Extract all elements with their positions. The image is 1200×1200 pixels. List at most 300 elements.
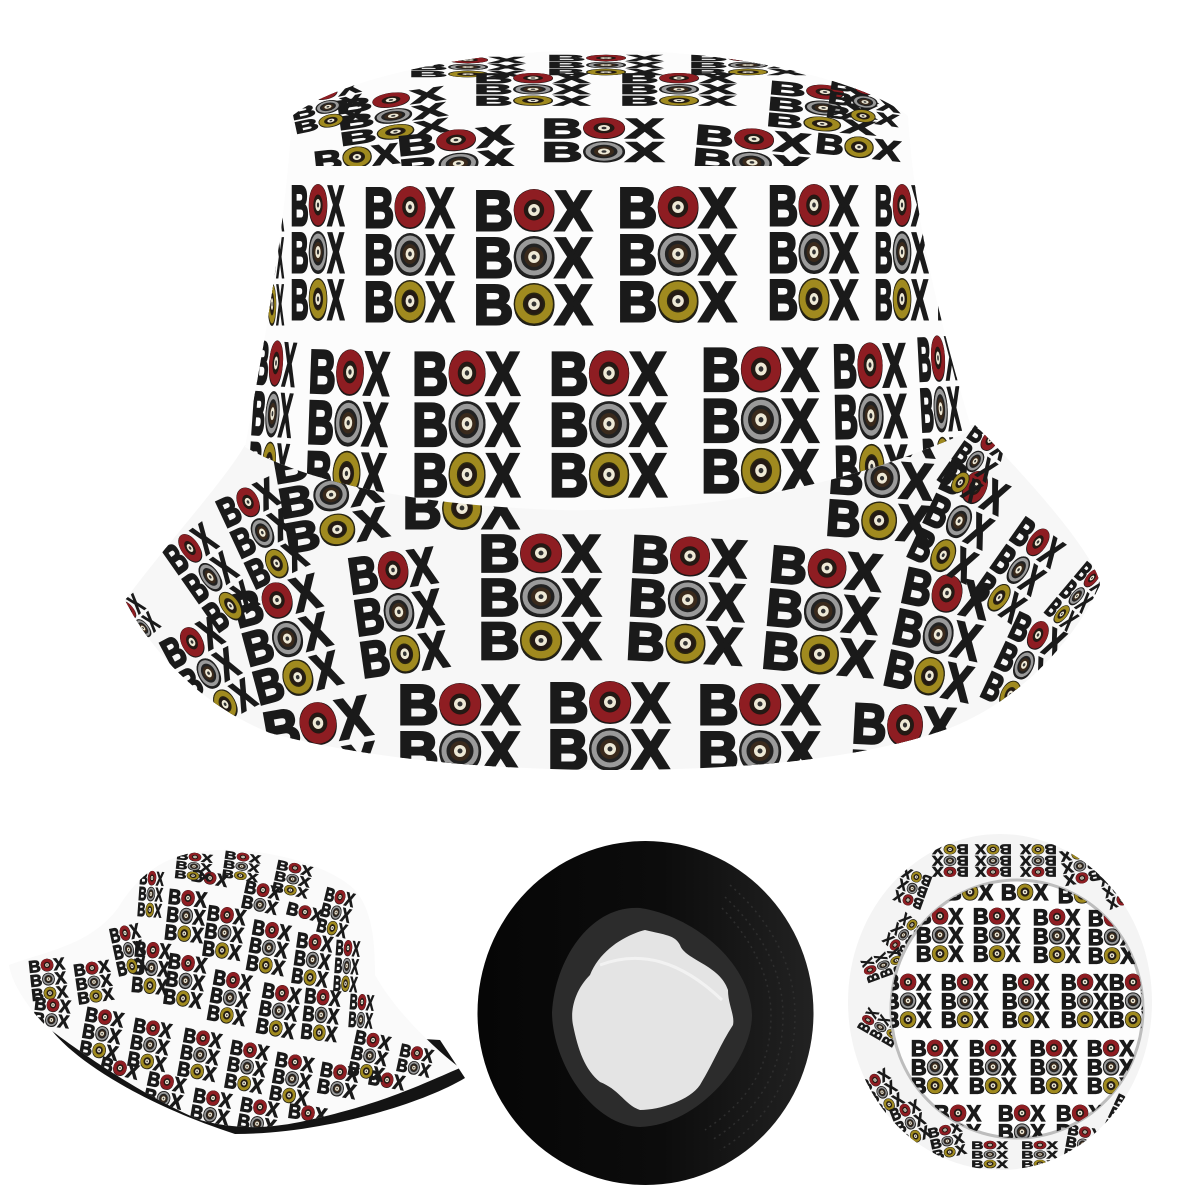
outer brim: BOX [865,1077,901,1109]
crown top pattern: BOX [542,113,664,144]
printed fabric: BOX [32,1008,71,1032]
outer brim: BOX [975,864,1012,879]
hat brim: BOX [259,684,375,765]
outer brim: BOX [1021,1158,1058,1171]
printed fabric: BOX [398,1040,436,1067]
main bucket hat [106,50,1113,811]
inner crown panel: BOX [1109,970,1156,995]
printed fabric: BOX [221,868,259,885]
outer brim: BOX [896,909,928,940]
hat brim: BOX [947,436,1001,488]
outer brim: BOX [1106,1104,1141,1134]
inner crown panel: BOX [1030,1036,1077,1061]
printed fabric: BOX [76,984,116,1008]
outer brim [848,834,1152,1171]
crown row one: BOX [875,223,928,285]
inner crown panel: BOX [1056,1101,1103,1126]
black inner brim edge [45,1020,465,1134]
hat brim: BOX [281,498,391,563]
inner crown panel: BOX [998,1120,1045,1145]
printed fabric: BOX [139,868,165,891]
small hat: side view [9,849,465,1139]
hat brim: BOX [176,544,245,612]
inner crown panel [884,880,1156,1145]
hat brim [126,425,1100,770]
printed fabric: BOX [175,1058,218,1087]
crown top pattern: BOX [339,115,451,151]
inner crown panel: BOX [1002,970,1049,995]
inner crown panel: BOX [1088,943,1135,969]
inner crown panel: BOX [1058,883,1105,908]
crown top pattern: BOX [827,88,902,117]
outer brim: BOX [879,929,911,961]
hat brim: BOX [901,519,983,593]
crown row two: BOX [250,381,294,450]
printed fabric: BOX [257,997,299,1027]
hat brim: BOX [479,613,600,671]
printed fabric: BOX [208,984,250,1014]
outer brim: BOX [895,875,930,900]
hat brim: BOX [121,607,165,650]
inner crown panel: BOX [1061,970,1108,995]
inner crown panel: BOX [1088,925,1135,950]
hat brim: BOX [548,671,669,734]
crown row two: BOX [919,377,962,445]
printed fabric: BOX [290,965,329,993]
crown top pattern: BOX [694,120,811,160]
printed fabric: BOX [267,1082,310,1111]
hat brim: BOX [965,564,1032,631]
hat brim: BOX [479,525,600,583]
stitched brim rows [705,885,795,1150]
printed fabric: BOX [273,869,311,891]
outer brim: BOX [1020,864,1057,879]
hat brim: BOX [171,639,246,709]
hat brim: BOX [1003,604,1071,667]
crown row one: BOX [260,226,284,289]
printed fabric: BOX [107,919,142,948]
printed fabric: BOX [181,1025,224,1054]
hat brim: BOX [989,633,1057,696]
outer brim: BOX [1066,1122,1103,1144]
printed fabric: BOX [222,858,261,876]
outer brim: BOX [891,886,926,912]
white crown lining [572,930,733,1110]
printed fabric: BOX [238,1094,281,1123]
crown top pattern: BOX [474,82,590,97]
outer brim: BOX [898,1123,934,1152]
outer brim: BOX [971,1158,1008,1171]
crown top pattern: BOX [689,68,805,77]
hat brim: BOX [403,384,518,446]
outer brim: BOX [975,852,1012,867]
inner crown panel: BOX [1088,906,1135,931]
inner crown panel: BOX [911,1073,958,1099]
inner crown panel: BOX [1061,1007,1108,1033]
hat brim: BOX [238,603,336,677]
inner crown panel: BOX [969,1036,1016,1061]
printed fabric: BOX [314,914,349,943]
crown top pattern: BOX [547,54,663,63]
inner crown panel: BOX [1033,905,1080,930]
crown row two: BOX [246,432,291,501]
printed fabric: BOX [224,849,262,867]
printed fabric: BOX [270,1066,313,1094]
crown row two: BOX [921,427,965,496]
outer brim: BOX [1112,1091,1147,1121]
crown row two: BOX [253,331,298,399]
crown row two: BOX [412,441,519,509]
crown top pattern: BOX [474,71,590,86]
crown row one: BOX [938,221,962,284]
inner crown panel: BOX [911,1036,958,1061]
inner crown panel: BOX [941,1007,988,1033]
hat brim: BOX [1070,556,1113,600]
inner crown panel: BOX [884,970,931,995]
printed fabric: BOX [176,850,214,866]
crown top pattern: BOX [398,143,516,186]
inner crown panel: BOX [969,1073,1016,1099]
printed fabric: BOX [165,903,206,931]
printed fabric: BOX [130,974,169,1000]
printed fabric: BOX [367,1066,407,1095]
inner crown panel: BOX [969,1055,1016,1080]
crown row one: BOX [618,176,736,239]
outer brim: BOX [887,919,920,950]
outer brim: BOX [1020,841,1057,856]
printed fabric: BOX [164,967,206,996]
hat brim: BOX [345,537,440,605]
hat brim: BOX [760,621,876,688]
crown row one: BOX [291,176,344,238]
crown top pattern: BOX [409,70,525,79]
outer brim: BOX [900,863,934,889]
hat brim: BOX [933,451,1015,525]
crown row one: BOX [474,179,592,242]
printed fabric: BOX [132,956,170,982]
inner crown panel: BOX [973,904,1020,929]
outer brim: BOX [1096,863,1131,889]
hat brim: BOX [240,532,314,598]
inner crown panel: BOX [916,904,963,929]
hat brim: BOX [830,406,937,469]
printed fabric: BOX [128,1032,171,1060]
outer brim: BOX [927,1120,963,1142]
hat brim: BOX [196,573,265,641]
printed fabric: BOX [125,1048,168,1077]
printed fabric: BOX [353,1026,393,1055]
crown top pattern: BOX [312,138,400,178]
outer brim: BOX [1062,866,1102,888]
crown row one: BOX [260,179,284,242]
printed fabric: BOX [29,968,68,991]
printed fabric: BOX [137,900,163,922]
crown top pattern: BOX [396,120,514,163]
printed fabric: BOX [222,1070,265,1099]
printed fabric: BOX [74,970,114,994]
printed fabric: BOX [348,1008,374,1033]
black brim lining [478,841,814,1185]
hat brim: BOX [698,720,819,783]
hat brim: BOX [211,471,285,537]
crown row one: BOX [364,177,454,240]
outer brim: BOX [1100,874,1135,900]
inner crown panel: BOX [934,1101,981,1126]
inner sweatband [552,908,752,1127]
crown row one: BOX [364,271,454,334]
printed fabric: BOX [349,990,375,1015]
printed fabric: BOX [273,1049,316,1078]
hat brim: BOX [625,612,743,677]
printed fabric: BOX [162,985,203,1014]
crown row two: BOX [549,391,666,459]
crown top pattern: BOX [409,63,525,72]
hat brim: BOX [187,670,263,740]
hat brim: BOX [154,608,230,678]
crown row two: BOX [701,337,818,404]
outer brim: BOX [1064,1134,1101,1156]
printed fabric: BOX [346,1057,386,1086]
printed fabric: BOX [322,883,357,912]
crown top pattern: BOX [290,90,365,124]
crown row one: BOX [618,223,736,286]
hat brim: BOX [398,720,519,783]
small hat: top view [848,834,1156,1171]
hat brim: BOX [267,731,383,811]
hat brim: BOX [226,502,299,567]
hat brim: BOX [269,428,379,493]
hat brim: BOX [630,525,748,589]
crown row two: BOX [832,333,906,401]
inner crown panel: BOX [1030,1055,1077,1080]
outer brim: BOX [971,1140,1008,1152]
outer brim: BOX [929,1131,966,1153]
hat brim: BOX [479,569,600,627]
crown row one: BOX [364,224,454,287]
printed fabric: BOX [206,902,247,931]
crown top pattern: BOX [542,137,664,168]
printed fabric: BOX [190,866,230,891]
printed fabric: BOX [395,1055,433,1082]
inner crown panel: BOX [973,923,1020,948]
hat brim: BOX [248,642,347,716]
crown row one: BOX [875,176,928,238]
crown top pattern: BOX [814,128,902,168]
outer brim: BOX [893,1110,928,1138]
inner crown panel: BOX [1002,1007,1049,1033]
printed fabric: BOX [292,947,332,975]
hat brim: BOX [403,431,518,493]
hat brim: BOX [698,673,819,736]
crown row one: BOX [875,270,928,332]
printed fabric: BOX [315,1076,358,1104]
inner crown panel: BOX [998,1101,1045,1126]
crown top pattern: BOX [620,82,736,97]
crown top pattern: BOX [767,93,878,124]
inner crown panel: BOX [941,970,988,995]
printed fabric: BOX [77,1037,120,1066]
printed fabric: BOX [318,899,353,927]
inner crown panel: BOX [941,989,988,1014]
printed fabric: BOX [247,934,289,964]
crown row one [268,184,942,326]
printed fabric: BOX [145,1068,188,1098]
outer brim: BOX [1062,1146,1098,1168]
hat brim: BOX [227,565,326,638]
hat brim: BOX [851,693,957,761]
printed fabric: BOX [98,1054,141,1085]
outer brim: BOX [858,955,884,984]
printed fabric: BOX [332,972,359,997]
printed fabric: BOX [295,929,334,958]
crown row two: BOX [412,391,519,459]
hat brim: BOX [984,537,1052,603]
printed fabric: BOX [211,966,254,996]
crown row one: BOX [768,269,858,332]
hat brim: BOX [848,740,955,807]
crown top pattern [293,54,902,166]
printed fabric: BOX [270,880,309,902]
crown row one: BOX [260,273,284,336]
outer brim: BOX [855,1005,883,1036]
printed fabric: BOX [205,1001,247,1031]
outer brim: BOX [1021,1149,1058,1162]
crown row two: BOX [549,442,666,510]
outer brim: BOX [1100,1117,1136,1146]
hat brim: BOX [627,569,745,633]
inner crown panel: BOX [1109,1007,1156,1033]
crown row two: BOX [701,438,818,506]
small hat: underside view [478,841,814,1185]
crown top pattern: BOX [474,94,590,108]
outer brim: BOX [1104,886,1139,912]
printed fabric: BOX [284,898,325,927]
printed fabric: BOX [254,1014,296,1044]
hat brim: BOX [548,718,669,781]
hat brim: BOX [357,621,452,689]
hat brim: BOX [917,485,999,559]
crown top pattern: BOX [825,102,900,131]
hat brim: BOX [351,579,446,647]
outer brim: BOX [971,1149,1008,1162]
outer brim: BOX [858,1065,894,1097]
crown row two: BOX [306,389,389,459]
inner crown panel: BOX [1033,942,1080,968]
printed fabric: BOX [138,884,164,906]
printed fabric: BOX [203,919,245,948]
crown row two: BOX [308,338,390,408]
printed fabric: BOX [178,1042,221,1070]
printed fabric: BOX [131,1015,174,1044]
crown top pattern: BOX [829,74,904,103]
printed fabric: BOX [334,954,360,979]
printed fabric: BOX [33,993,72,1017]
inner crown panel: BOX [1109,989,1156,1014]
inner crown panel: BOX [1056,1120,1103,1145]
printed fabric: BOX [235,1111,278,1139]
hat brim: BOX [880,640,977,713]
outer brim: BOX [1058,842,1097,864]
printed fabric: BOX [201,937,242,966]
outer brim: BOX [932,852,969,867]
inner crown panel: BOX [973,941,1020,967]
crown row one: BOX [291,270,344,332]
inner crown panel: BOX [1061,989,1108,1014]
crown top pattern: BOX [287,77,362,110]
crown row two: BOX [304,439,387,510]
crown top pattern: BOX [547,61,663,70]
crown row two: BOX [833,384,907,452]
inner crown panel: BOX [1033,924,1080,949]
hat brim: BOX [764,578,880,645]
inner crown panel: BOX [911,1055,958,1080]
printed fabric [9,849,460,1139]
printed fabric: BOX [163,921,204,948]
hat brim: BOX [398,673,519,736]
crown row one: BOX [938,268,962,331]
crown row one: BOX [618,270,736,333]
printed fabric: BOX [115,952,149,981]
printed fabric: BOX [250,916,293,946]
outer brim: BOX [885,945,911,975]
printed fabric: BOX [287,1101,328,1128]
printed fabric: BOX [72,956,112,980]
inner crown panel: BOX [1087,1036,1134,1061]
printed fabric: BOX [244,951,286,981]
hat brim: BOX [1055,574,1098,618]
outer brim: BOX [932,864,969,879]
printed fabric: BOX [349,1042,389,1070]
inner crown panel: BOX [1030,1073,1077,1099]
outer brim: BOX [1020,852,1057,867]
printed fabric: BOX [239,891,280,919]
crown row one: BOX [938,174,962,237]
hat brim: BOX [1039,592,1083,636]
crown row two: BOX [412,340,519,408]
crown row two: BOX [834,434,908,502]
inner crown panel: BOX [916,941,963,967]
printed fabric: BOX [225,1054,268,1082]
printed fabric: BOX [83,1004,126,1033]
printed fabric: BOX [111,935,146,964]
printed fabric: BOX [188,1102,231,1130]
inner crown panel: BOX [946,880,993,905]
inner crown panel: BOX [934,1120,981,1145]
inner crown panel: BOX [1087,1055,1134,1080]
crown top pattern: BOX [768,77,880,108]
printed fabric: BOX [133,938,172,965]
printed fabric: BOX [174,868,212,885]
printed fabric: BOX [243,876,283,904]
printed fabric: BOX [301,1003,340,1030]
inner crown panel: BOX [884,989,931,1014]
printed fabric: BOX [28,954,67,977]
printed fabric: BOX [275,858,314,880]
printed fabric: BOX [335,936,361,961]
hat brim: BOX [156,516,225,583]
printed fabric: BOX [318,1059,361,1088]
hat brim: BOX [1004,509,1071,575]
inner crown panel: BOX [1002,989,1049,1014]
inner crown panel: BOX [1001,880,1048,905]
crown row one: BOX [291,223,344,285]
outer brim: BOX [932,841,969,856]
crown row one: BOX [768,175,858,238]
outer brim: BOX [872,1090,908,1121]
crown top pattern: BOX [620,71,736,86]
hat brim: BOX [824,491,932,553]
crown row two: BOX [549,341,666,408]
